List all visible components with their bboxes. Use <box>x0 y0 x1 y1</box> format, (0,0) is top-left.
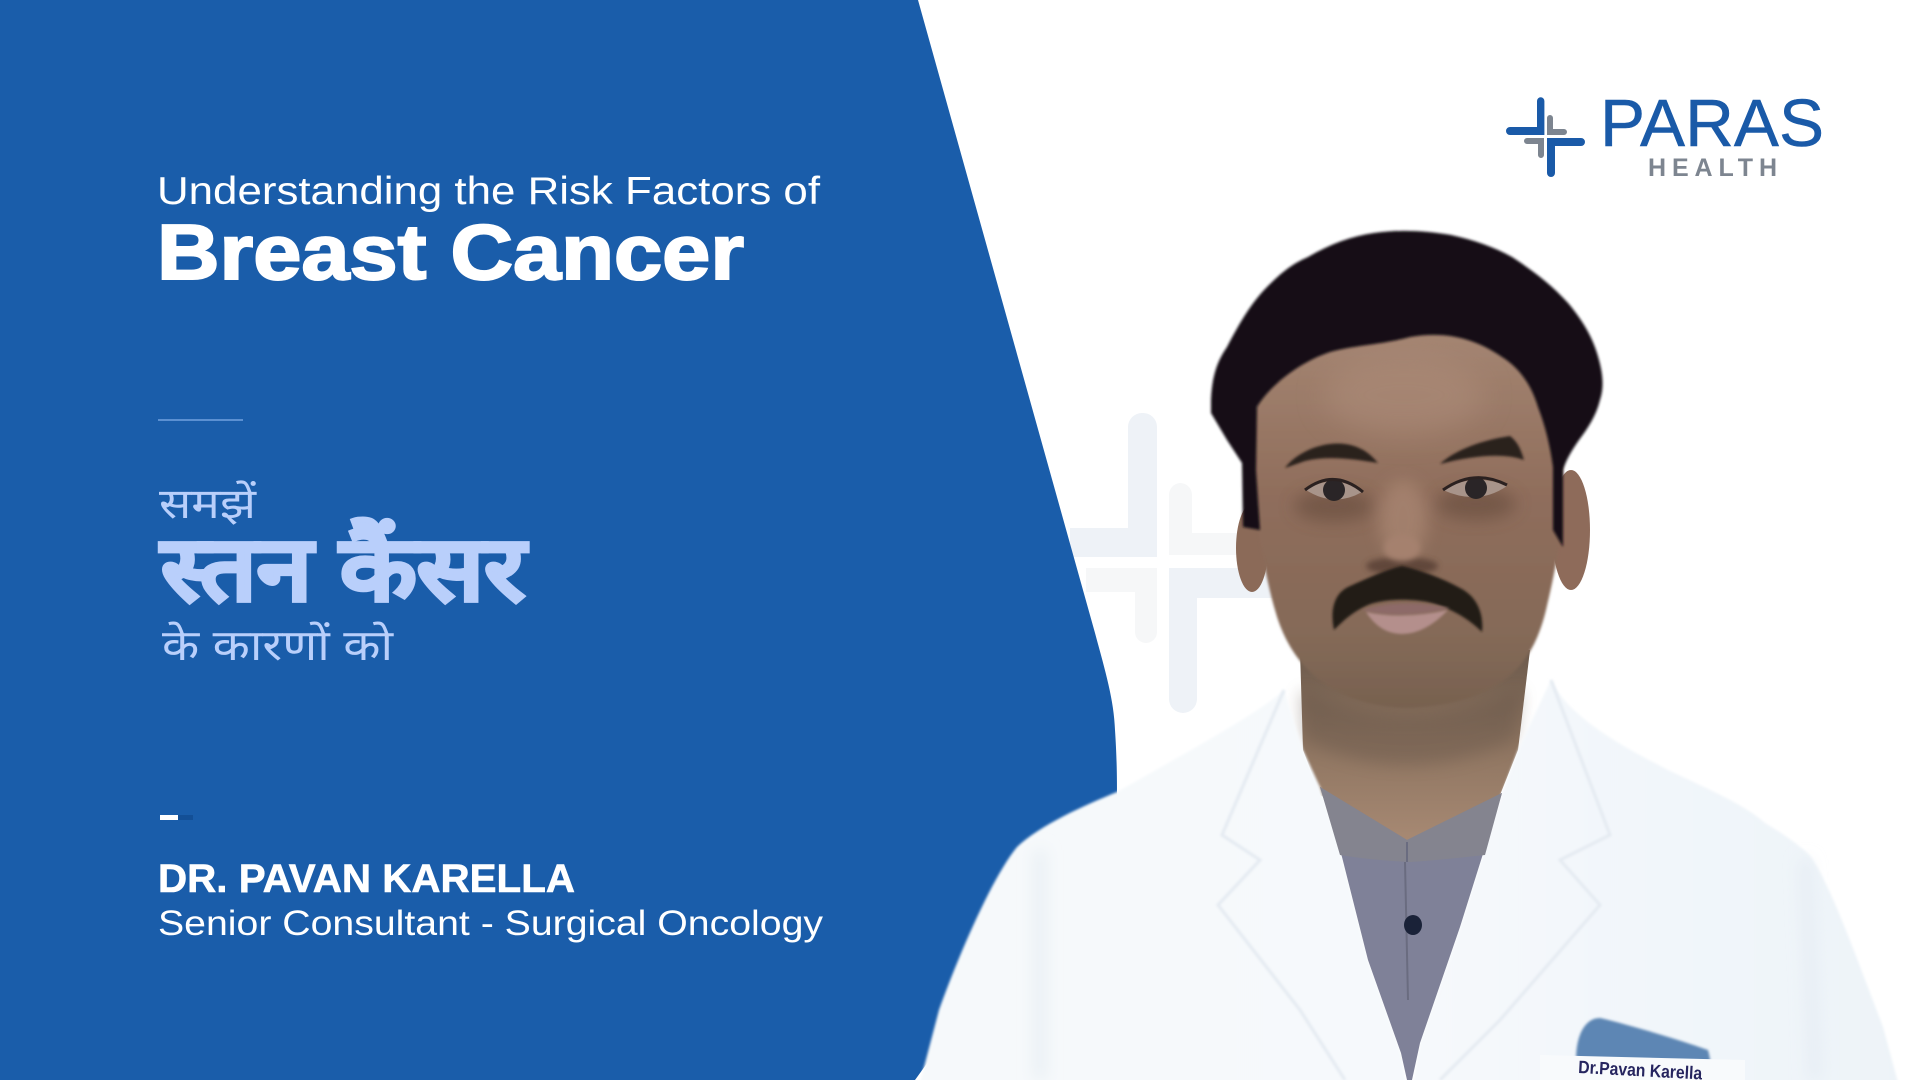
moustache <box>1333 566 1482 632</box>
ears <box>1236 470 1590 592</box>
accent dash <box>160 815 193 820</box>
pocket with name badge <box>1540 1018 1745 1080</box>
doctor title: Senior Consultant - Surgical Oncology <box>158 904 824 943</box>
face <box>1252 325 1563 708</box>
doctor name: DR. PAVAN KARELLA <box>158 857 575 901</box>
panel: blue curved background <box>0 0 1117 1080</box>
eyebrows <box>1285 436 1524 468</box>
doctor credentials <box>158 857 824 943</box>
white coat <box>918 680 1900 1080</box>
under-eye shadows <box>1294 490 1374 522</box>
doctor portrait illustration <box>918 231 1900 1080</box>
eyes <box>1305 477 1507 501</box>
hindi line 3: के कारणों को <box>162 621 394 670</box>
heading: hindi title <box>159 480 529 670</box>
watermark: faint cross logo <box>1070 413 1280 713</box>
hindi line 1: समझें <box>159 480 257 527</box>
heading: english title <box>157 170 820 296</box>
logo wordmark: PARAS <box>1600 86 1824 161</box>
grey shirt <box>1320 787 1502 1080</box>
title line 1: Understanding the Risk Factors of <box>157 170 820 213</box>
divider line <box>158 419 243 421</box>
lips <box>1362 603 1450 634</box>
neck <box>1300 650 1530 845</box>
title line 2: Breast Cancer <box>157 208 744 296</box>
icon: logo cross <box>1506 97 1585 177</box>
hindi line 2: स्तन कैंसर <box>159 517 529 620</box>
logo sub wordmark: HEALTH <box>1648 154 1777 182</box>
hair <box>1211 231 1603 547</box>
logo: Paras Health <box>1506 86 1824 182</box>
nose <box>1366 480 1438 575</box>
shirt button <box>1404 915 1422 935</box>
